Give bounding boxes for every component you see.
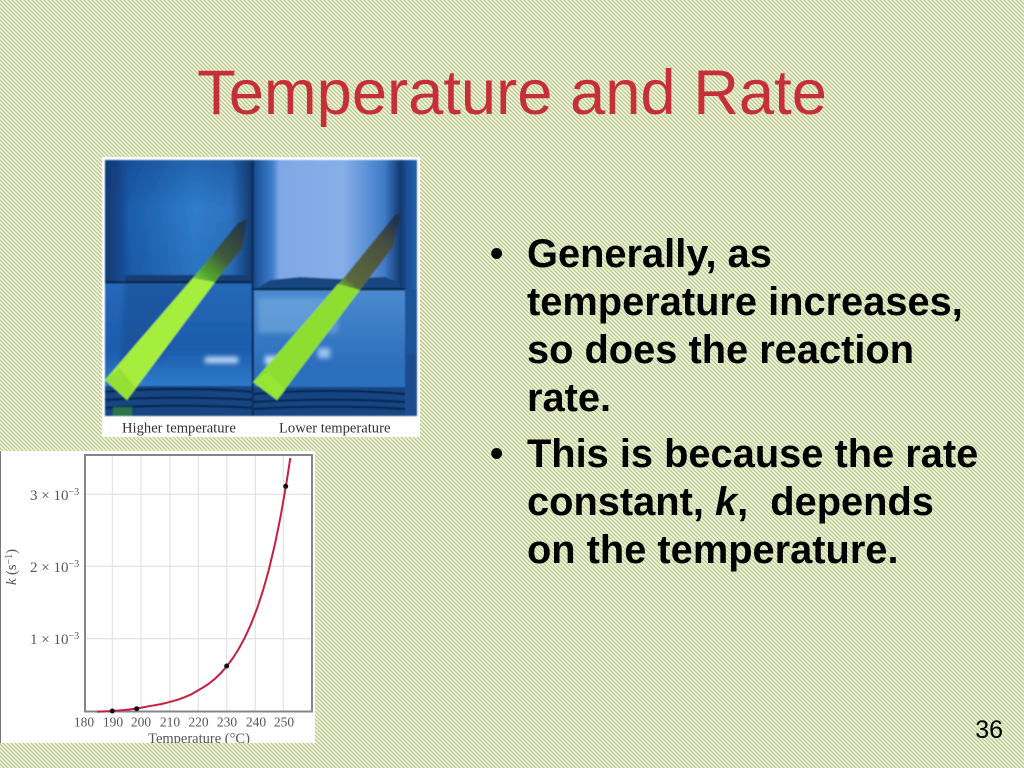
bullet list <box>490 232 978 572</box>
right glow stick <box>338 212 402 290</box>
curve <box>97 458 290 712</box>
caption: Higher temperature <box>122 420 236 436</box>
x tick labels: 210 <box>160 714 180 730</box>
text: temperature increases, <box>527 280 963 324</box>
left glow stick <box>193 219 247 282</box>
y tick labels: 3 × 10 <box>30 488 68 504</box>
x tick labels: 220 <box>188 714 209 730</box>
title: Temperature and Rate <box>197 58 827 128</box>
text: This is because the rate <box>527 432 978 476</box>
y axis label: ) <box>4 549 20 554</box>
x tick labels <box>74 714 294 730</box>
y axis label: −1 <box>4 554 15 564</box>
text: constant, k, depends <box>527 480 934 524</box>
y tick labels: −3 <box>68 559 79 570</box>
x tick labels: 190 <box>103 714 123 730</box>
caption: Lower temperature <box>279 420 390 436</box>
text: • <box>490 433 503 475</box>
slide number: 36 <box>975 716 1003 744</box>
plot frame <box>85 455 312 712</box>
chart: rate constant vs temperature <box>0 451 315 743</box>
y tick labels: −3 <box>68 631 79 642</box>
y tick labels: 1 × 10 <box>30 632 68 648</box>
y tick labels: 2 × 10 <box>30 560 68 576</box>
text: so does the reaction <box>527 328 914 372</box>
y axis label: k (s <box>4 564 20 585</box>
x tick labels: 200 <box>131 714 151 730</box>
caption <box>122 420 390 436</box>
text: Generally, as <box>527 232 772 276</box>
x tick labels: 240 <box>246 714 266 730</box>
right jar <box>253 160 417 416</box>
y tick labels <box>30 487 79 648</box>
text: rate. <box>527 376 611 420</box>
text: • <box>490 233 503 275</box>
x tick labels: 180 <box>74 714 94 730</box>
photo: glow sticks at two temperatures <box>102 157 420 437</box>
grid <box>85 455 312 711</box>
x tick labels: 250 <box>274 714 294 730</box>
data points <box>110 484 288 714</box>
y tick labels: −3 <box>68 487 79 498</box>
text: on the temperature. <box>527 528 899 572</box>
x tick labels: 230 <box>217 714 237 730</box>
left jar <box>105 160 253 416</box>
